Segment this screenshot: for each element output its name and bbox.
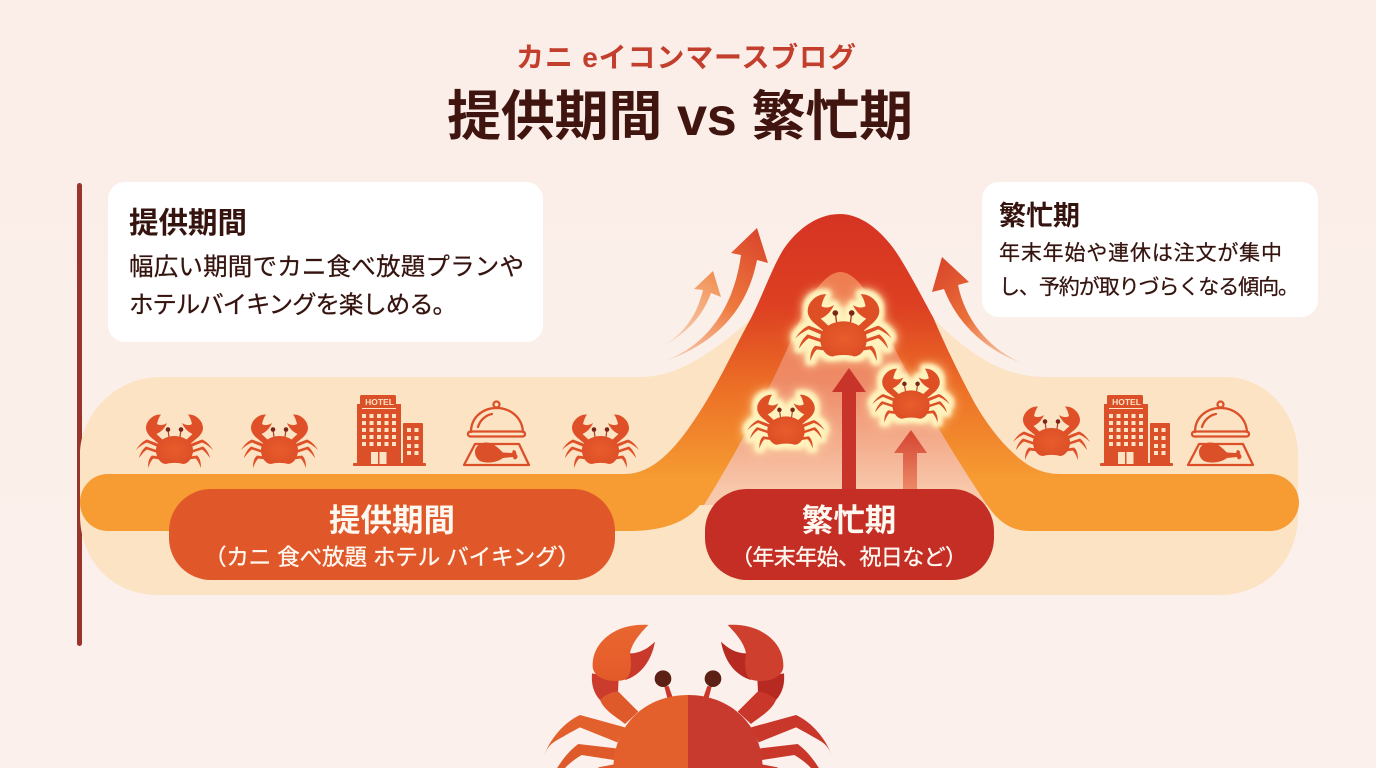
panel text: availability: 幅広い期間でカニ食べ放題プランや [129,253,524,281]
icon: meal cloche right [1188,402,1253,465]
panel text: busy season: し、予約が取りづらくなる傾向。 [999,276,1299,299]
icon: hotel left [353,395,426,466]
icon: crab 2 [241,414,318,468]
inner light bell [704,272,987,505]
icon: hotel left: HOTEL [365,397,394,407]
pale background band [80,320,1298,595]
icon: meal cloche left [464,402,529,465]
timeline axis line [77,183,82,646]
arrow: centre short [894,430,927,490]
main title: 提供期間 vs 繁忙期 [447,87,913,147]
left half of crab [544,625,688,768]
glowing crab left [747,395,825,449]
label pill: busy season: 繁忙期 [802,502,896,538]
panel text: availability [129,253,524,319]
label pill: busy season: （年末年始、祝日など） [731,545,967,570]
panel: busy season description [982,182,1318,317]
arrow: centre tall [832,368,866,492]
arrow: small rising left [665,271,721,345]
icon: large crab mascot [544,625,832,768]
panel: availability description [108,182,543,342]
icon: crab 1 [136,414,213,468]
panel text: busy season [999,242,1299,299]
orange availability band and demand bell curve [80,214,1299,531]
label pill: availability [169,489,615,580]
arrow: rising right [932,257,1022,363]
panel text: busy season: 年末年始や連休は注文が集中 [999,242,1282,265]
glowing crab right [872,369,950,423]
right half of crab [688,625,832,768]
panel text: availability: ホテルバイキングを楽しめる。 [129,291,457,319]
glowing crab top [795,294,892,362]
heading block [447,41,913,147]
panel heading: busy season: 繁忙期 [999,201,1080,231]
label pill: busy season [705,489,994,580]
arrow: large rising left [663,228,768,362]
icon: crab 3 [562,414,639,468]
blog name: カニ eイコンマースブログ [516,41,856,73]
label pill: availability: 提供期間 [329,502,455,538]
icon: hotel right [1100,395,1173,466]
panel heading: availability: 提供期間 [129,207,247,240]
icon: hotel right: HOTEL [1112,397,1141,407]
label pill: availability: （カニ 食べ放題 ホテル バイキング） [204,545,580,570]
icon: crab right [1013,406,1090,460]
chart: demand timeline with peak [80,214,1299,595]
